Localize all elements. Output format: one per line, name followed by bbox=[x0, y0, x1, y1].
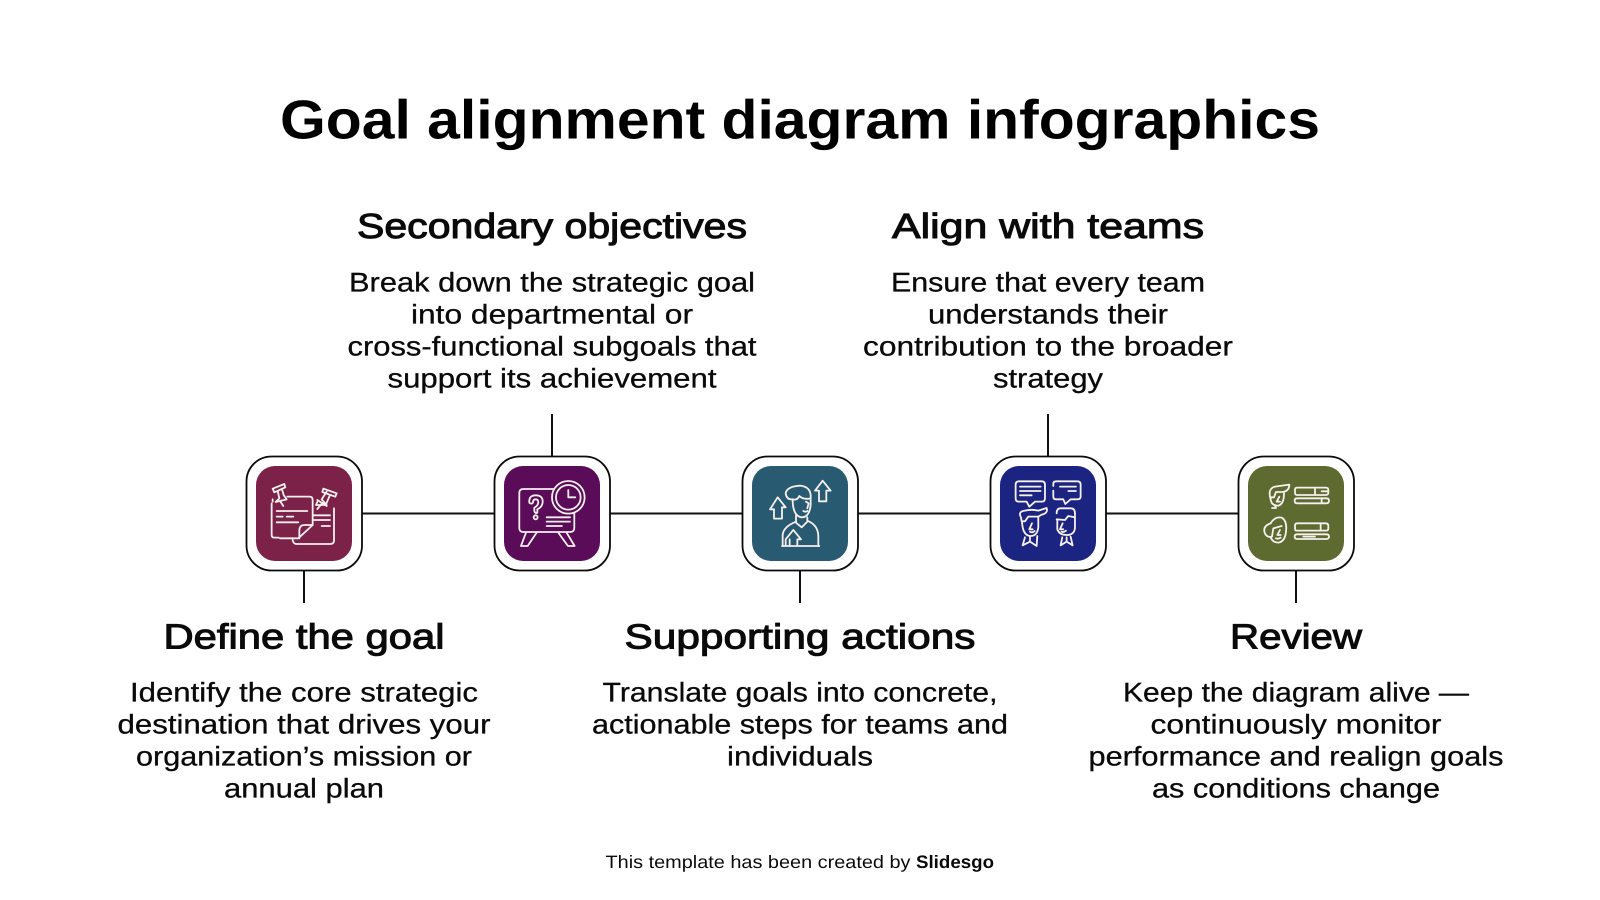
icon: two people in conversation bbox=[1016, 481, 1081, 546]
text block: define the goal: annual plan bbox=[224, 774, 384, 804]
text block: define the goal: destination that drives your bbox=[118, 710, 491, 740]
text block: supporting actions: actionable steps for teams and bbox=[592, 710, 1008, 740]
icon box: supporting actions bbox=[742, 456, 858, 570]
text block: supporting actions bbox=[592, 678, 1008, 772]
footer credit: Slidesgo bbox=[916, 852, 994, 872]
icon box: define the goal bbox=[246, 456, 362, 570]
text block: review: as conditions change bbox=[1152, 774, 1440, 804]
text block: align with teams: contribution to the broader bbox=[863, 332, 1233, 362]
heading: align with teams: Align with teams bbox=[892, 207, 1204, 246]
text block: review: continuously monitor bbox=[1150, 710, 1442, 740]
text block: supporting actions: Translate goals into concrete, bbox=[602, 678, 998, 708]
icon box: review bbox=[1238, 456, 1354, 570]
text block: secondary objectives: Break down the strategic goal bbox=[349, 268, 755, 298]
panel: secondary objectives text bbox=[348, 207, 757, 394]
heading: review: Review bbox=[1230, 618, 1363, 656]
text block: define the goal bbox=[118, 678, 491, 804]
text block: supporting actions: individuals bbox=[727, 742, 873, 772]
panel: review text bbox=[1088, 618, 1504, 804]
text block: review: performance and realign goals bbox=[1088, 742, 1504, 772]
text block: secondary objectives: support its achievement bbox=[388, 364, 717, 394]
text block: align with teams: strategy bbox=[993, 364, 1104, 394]
text block: review bbox=[1088, 678, 1504, 804]
text block: secondary objectives: into departmental or bbox=[411, 300, 693, 330]
icon: presentation board with clock bbox=[519, 481, 585, 546]
icon: person with up arrows bbox=[770, 481, 831, 546]
text block: align with teams: Ensure that every team bbox=[891, 268, 1205, 298]
heading: supporting actions: Supporting actions bbox=[624, 618, 976, 656]
panel: supporting actions text bbox=[592, 618, 1008, 772]
text block: secondary objectives: cross-functional subgoals that bbox=[348, 332, 757, 362]
title: Goal alignment diagram infographics bbox=[280, 88, 1320, 150]
text block: review: Keep the diagram alive — bbox=[1123, 678, 1469, 708]
text block: align with teams: understands their bbox=[928, 300, 1168, 330]
text block: define the goal: organization’s mission or bbox=[136, 742, 472, 772]
text block: define the goal: Identify the core strategic bbox=[130, 678, 478, 708]
icon box: secondary objectives bbox=[494, 456, 610, 570]
icon box: align with teams bbox=[990, 456, 1106, 570]
icon: faces with progress bars bbox=[1264, 485, 1329, 543]
panel: align with teams text bbox=[863, 207, 1233, 394]
icon: pinned notes bbox=[272, 484, 337, 544]
heading: secondary objectives: Secondary objectives bbox=[357, 207, 747, 246]
heading: define the goal: Define the goal bbox=[164, 618, 444, 656]
text block: secondary objectives bbox=[348, 268, 757, 394]
footer credit: This template has been created by bbox=[606, 852, 910, 872]
text block: align with teams bbox=[863, 268, 1233, 394]
timeline connectors bbox=[304, 414, 1296, 603]
panel: define the goal text bbox=[118, 618, 491, 804]
